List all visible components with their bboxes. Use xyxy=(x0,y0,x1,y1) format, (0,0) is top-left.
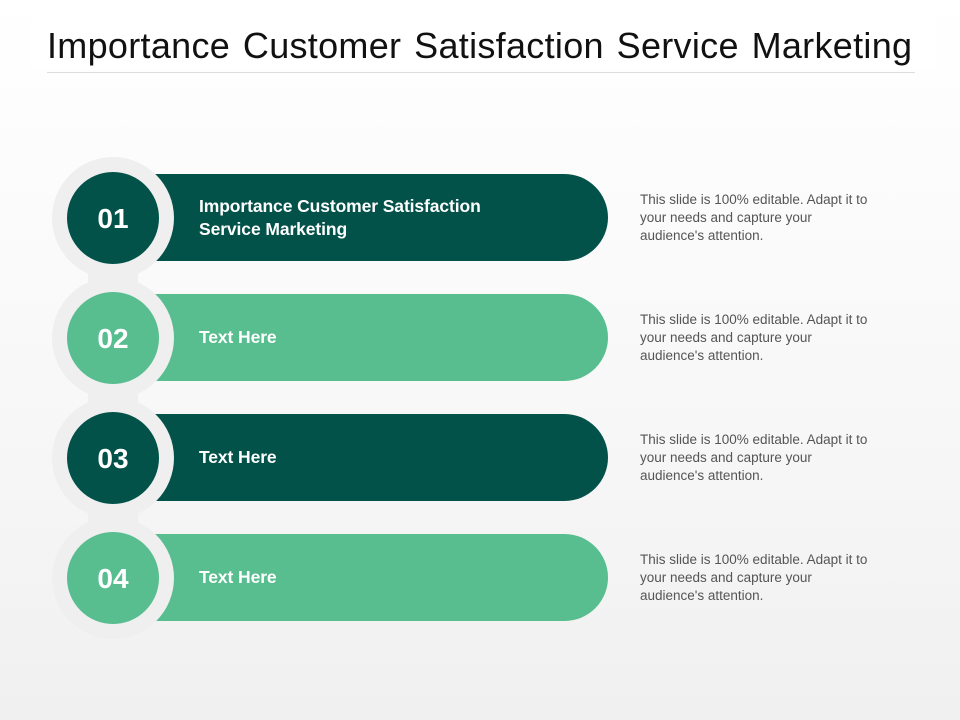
bar 4: Text Here xyxy=(199,567,277,587)
bar 1: Importance Customer Satisfaction xyxy=(199,196,481,216)
number circles with grey spine: 01 xyxy=(97,203,129,234)
bar 2: Text Here xyxy=(199,327,277,347)
bar 3 xyxy=(150,414,608,501)
number circles with grey spine: 03 xyxy=(97,443,129,474)
number circles with grey spine: 04 xyxy=(97,563,129,594)
description 2: This slide is 100% editable. Adapt it to your needs and capture your audience's attention. xyxy=(640,312,867,363)
title: Importance Customer Satisfaction Service Marketing xyxy=(47,25,912,66)
description 1: This slide is 100% editable. Adapt it to your needs and capture your audience's attention. xyxy=(640,192,867,243)
number circles with grey spine: 02 xyxy=(97,323,129,354)
bar 3: Text Here xyxy=(199,447,277,467)
bar 2 xyxy=(150,294,608,381)
bar 1 xyxy=(150,174,608,261)
bar 1: Service Marketing xyxy=(199,218,347,238)
description 4: This slide is 100% editable. Adapt it to your needs and capture your audience's attention. xyxy=(640,552,867,603)
bar 4 xyxy=(150,534,608,621)
description 3: This slide is 100% editable. Adapt it to your needs and capture your audience's attention. xyxy=(640,432,867,483)
